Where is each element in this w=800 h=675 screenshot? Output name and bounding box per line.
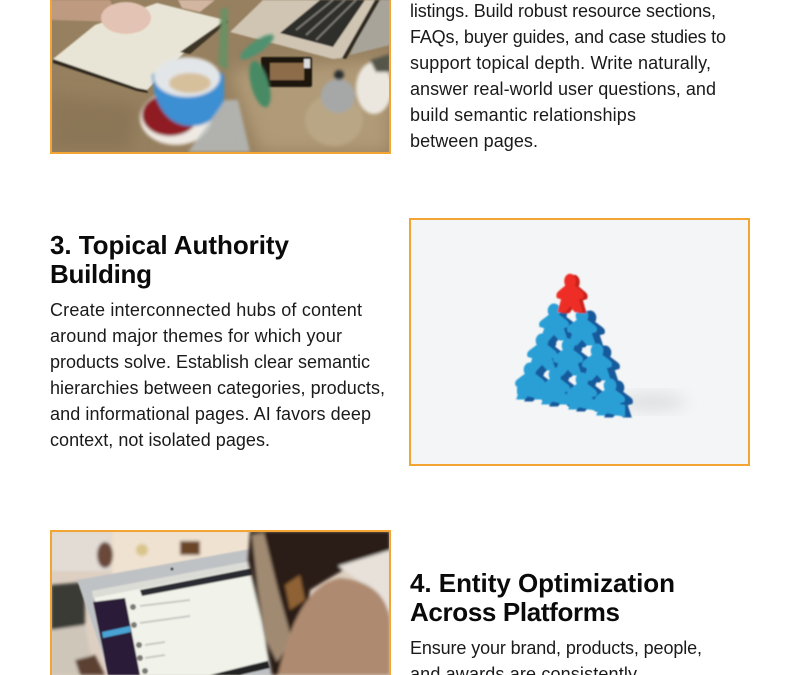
text block: section 3 body: hierarchies between categories, products, <box>50 378 385 398</box>
heading: 4. Entity Optimization Across Platforms <box>410 568 675 627</box>
text block: section 3 body: and informational pages. AI favors deep <box>50 404 371 424</box>
text block: section 2 continuation: between pages. <box>410 131 538 151</box>
text block: section 2 continuation: FAQs, buyer guides, and case studies to <box>410 27 726 47</box>
heading: 4. Entity Optimization Across Platforms: 4. Entity Optimization <box>410 568 675 598</box>
photo border <box>51 531 390 675</box>
heading: 4. Entity Optimization Across Platforms: Across Platforms <box>410 597 620 627</box>
text block: section 2 continuation: listings. Build robust resource sections, <box>410 1 716 21</box>
text block: section 3 body <box>50 300 385 450</box>
text block: section 3 body: context, not isolated pages. <box>50 430 270 450</box>
text block: section 4 body <box>410 638 702 675</box>
text block: section 2 continuation: support topical depth. Write naturally, <box>410 53 711 73</box>
text block: section 4 body: Ensure your brand, products, people, <box>410 638 702 658</box>
table tone bands <box>51 60 390 152</box>
heading: 3. Topical Authority Building: 3. Topical Authority <box>50 230 290 260</box>
text block: section 3 body: products solve. Establish clear semantic <box>50 352 370 372</box>
photo: person working on a laptop <box>51 531 390 675</box>
text block: section 2 continuation: answer real-world user questions, and <box>410 79 716 99</box>
heading: 3. Topical Authority Building: Building <box>50 259 152 289</box>
photo border <box>51 0 390 153</box>
text block: section 3 body: Create interconnected hubs of content <box>50 300 362 320</box>
photo: pyramid of blue meeples topped by a red meeple <box>410 219 749 465</box>
heading: 3. Topical Authority Building <box>50 230 290 289</box>
text block: section 2 continuation <box>410 1 726 151</box>
photo border <box>410 219 749 465</box>
photo: notebook, laptop and coffee on a desk <box>51 0 392 153</box>
text block: section 3 body: around major themes for which your <box>50 326 342 346</box>
text block: section 2 continuation: build semantic relationships <box>410 105 636 125</box>
